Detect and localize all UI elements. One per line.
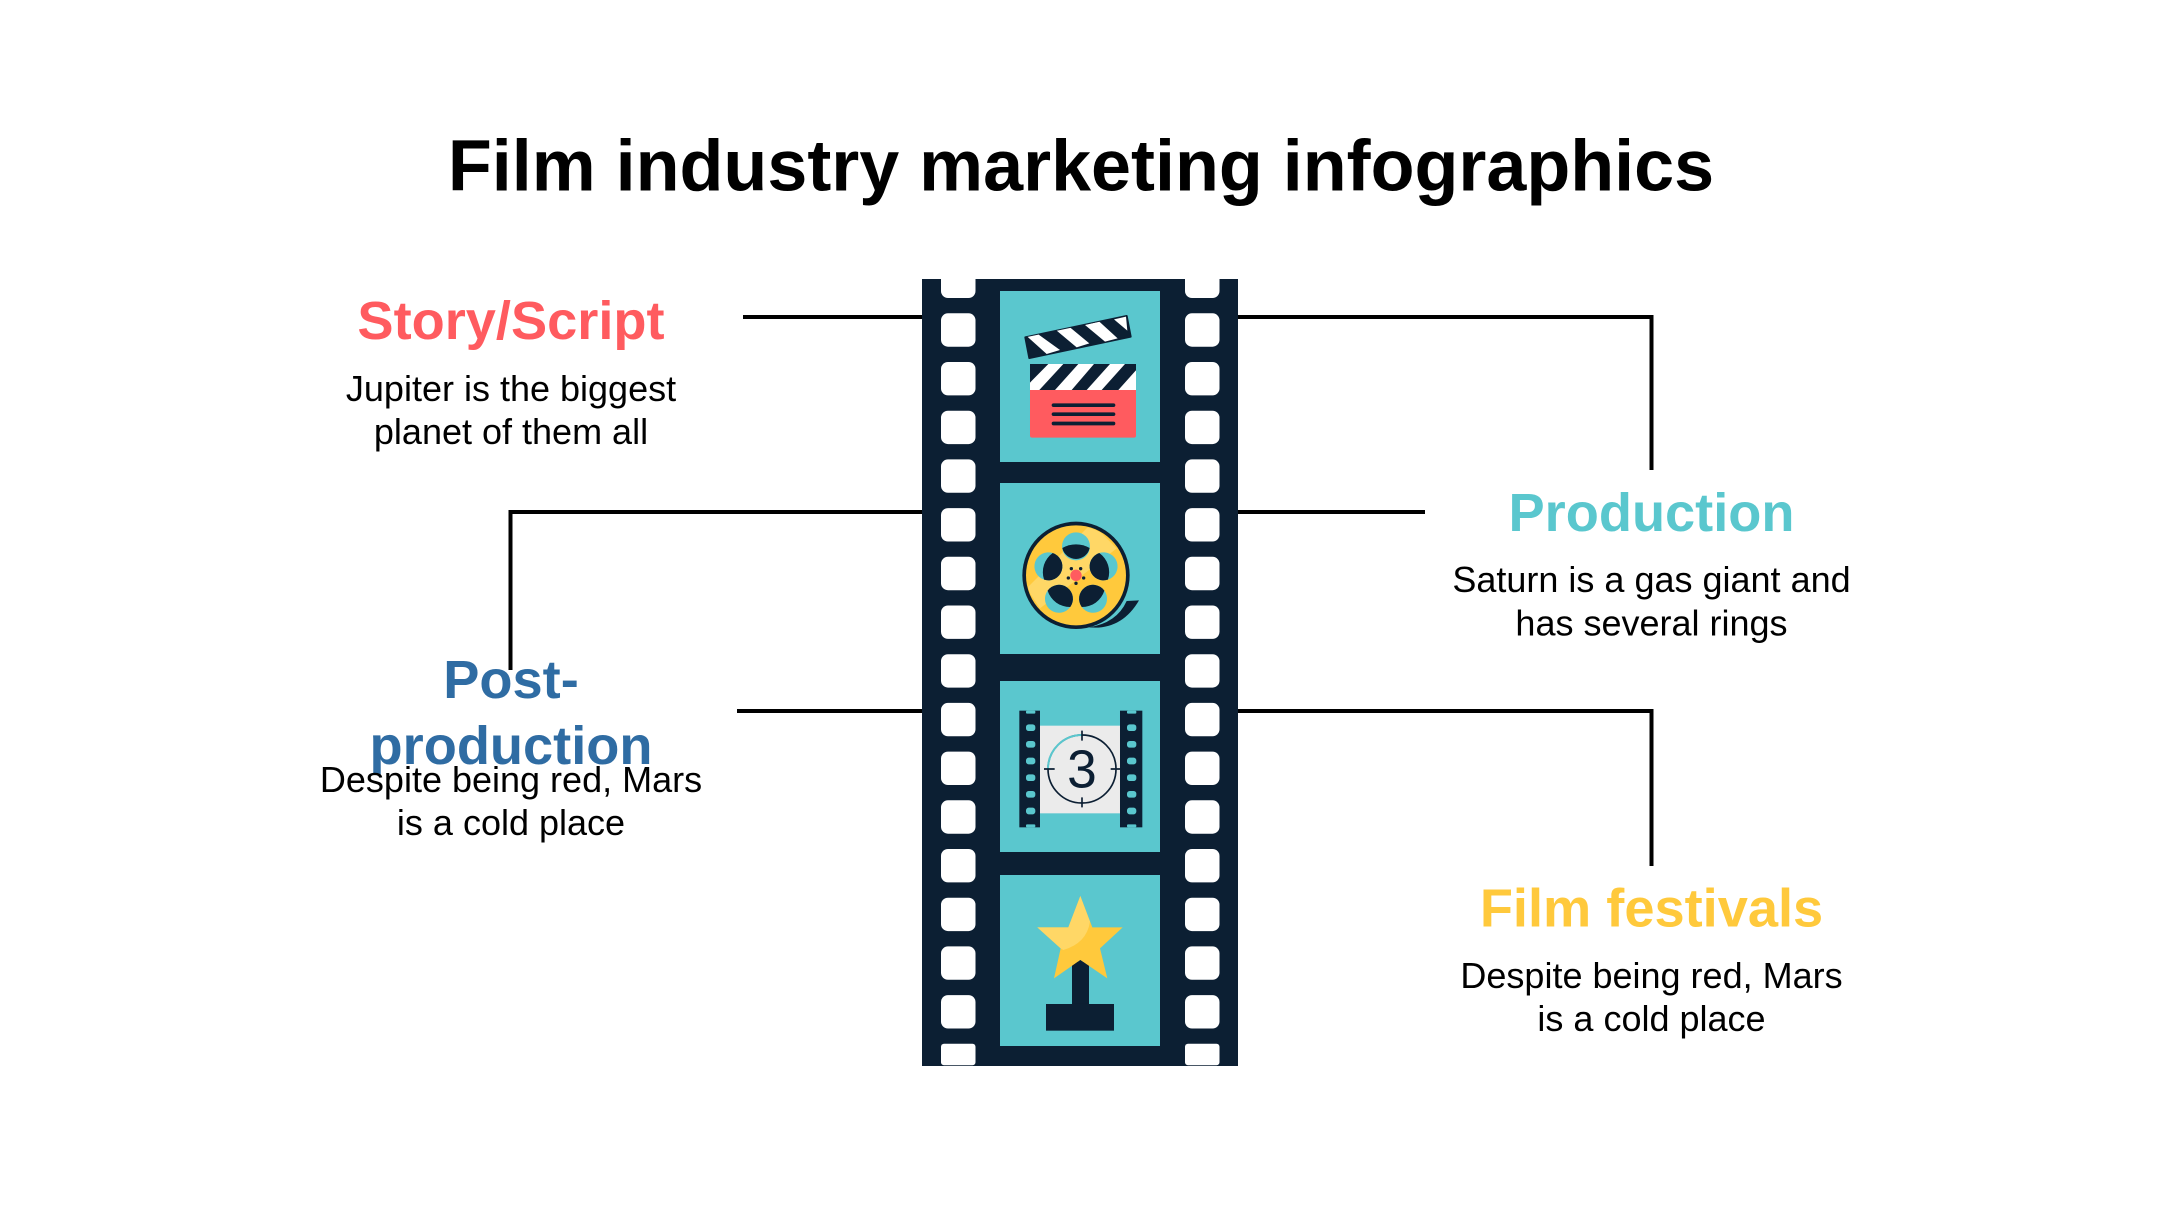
block: Post-production: is a cold place bbox=[397, 802, 625, 843]
perforations bbox=[941, 265, 1220, 1065]
frame 2 bbox=[1000, 483, 1160, 654]
block: Story/Script bbox=[346, 291, 676, 452]
frame 1 bbox=[1000, 291, 1160, 462]
icon: clapperboard bbox=[1024, 315, 1136, 438]
block: Film festivals: Despite being red, Mars bbox=[1460, 955, 1843, 996]
connector: Post-production lower bbox=[737, 709, 922, 713]
connector: Post-production bbox=[510, 512, 922, 670]
film strip bbox=[922, 265, 1238, 1066]
block: Post-production: Despite being red, Mars bbox=[320, 759, 702, 800]
block: Story/Script: Jupiter is the biggest bbox=[346, 368, 676, 409]
connector: Story/Script bbox=[743, 315, 922, 319]
icon: film reel bbox=[1022, 522, 1139, 629]
block: Production: Production bbox=[1509, 483, 1794, 543]
frame 4 bbox=[1000, 875, 1160, 1046]
connector: Production lower bbox=[1238, 510, 1425, 514]
block: Post-production: Post- bbox=[443, 650, 579, 710]
block: Production: Saturn is a gas giant and bbox=[1452, 559, 1851, 600]
block: Film festivals bbox=[1460, 878, 1843, 1039]
icon: countdown leader bbox=[1019, 711, 1142, 827]
block: Story/Script: planet of them all bbox=[374, 411, 648, 452]
block: Film festivals: Film festivals bbox=[1480, 878, 1823, 938]
connector: Film festivals bbox=[1238, 711, 1652, 866]
block: Post-production bbox=[320, 650, 702, 843]
block: Post-production: production bbox=[370, 716, 652, 776]
block: Story/Script: Story/Script bbox=[357, 291, 665, 351]
frame 3 bbox=[1000, 681, 1160, 852]
icon: award trophy bbox=[1037, 896, 1123, 1031]
block: Film festivals: is a cold place bbox=[1537, 998, 1766, 1039]
title: Film industry marketing infographics bbox=[448, 126, 1714, 206]
icon: countdown leader: 3 bbox=[1067, 740, 1097, 799]
strip background bbox=[922, 279, 1238, 1066]
connector: Production bbox=[1238, 317, 1652, 470]
block: Production: has several rings bbox=[1515, 602, 1788, 644]
block: Production bbox=[1452, 483, 1851, 644]
